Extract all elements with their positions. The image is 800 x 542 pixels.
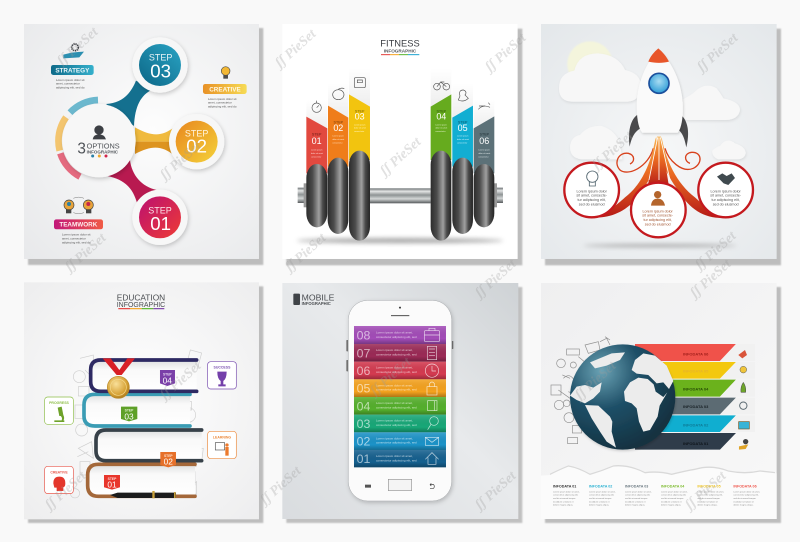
band text: Lorem ipsum dolor sit amet,: [376, 436, 413, 440]
info columns: INFODATA 01: [553, 485, 576, 489]
ribbon step 01: Lorem ipsum: [311, 149, 323, 152]
ribbon step 06: STEP: [480, 133, 490, 137]
watermarks: ʃʃ PieSet: [271, 26, 320, 72]
bookmark step 01: STEP: [108, 477, 117, 481]
teamwork label: Lorem ipsum dolor sit: [62, 233, 91, 237]
continents: [570, 352, 673, 448]
teamwork label: adipiscing elit, sed do: [62, 240, 91, 244]
step 01 circle: 01: [150, 213, 171, 234]
watermarks: ʃʃ PieSet: [156, 138, 205, 184]
circle centre: sit amet, consecte-: [642, 214, 674, 218]
center circle: [62, 104, 136, 177]
panel: three options infographic: [24, 24, 263, 265]
ribbon step 01: consectetur: [311, 155, 322, 158]
icon: businessman: [93, 125, 106, 139]
watermarks: ʃʃ PieSet: [481, 30, 530, 76]
info body text: consectetur adipiscing elit,: [553, 494, 579, 497]
info body text: sed do eiusmod tempor: [733, 497, 756, 500]
creative box: [45, 466, 73, 494]
watermarks: ʃʃ PieSet: [681, 468, 730, 514]
paper strips: [306, 68, 494, 130]
circle centre: tur adipiscing elit,: [644, 218, 672, 222]
bookmark step 04: STEP: [163, 373, 172, 377]
bar: [370, 188, 431, 203]
info body text: sed do eiusmod tempor: [697, 497, 720, 500]
ribbon step 02: dolor sit amet: [332, 138, 345, 141]
band 03: [635, 398, 755, 414]
circle right: tur adipiscing elit,: [712, 198, 740, 202]
band numbers: 06: [357, 364, 371, 378]
ribbon step 03: dolor sit amet: [354, 127, 366, 130]
step 03 circle: [132, 37, 188, 93]
info body text: sed do eiusmod tempor: [553, 497, 576, 500]
info body text: Lorem ipsum dolor sit amet,: [625, 490, 652, 493]
bookmark step 02: [160, 452, 176, 467]
ribbon step 02: STEP: [334, 120, 344, 124]
info body text: incididunt ut labore et: [553, 500, 574, 503]
band 04: [635, 380, 755, 397]
icon: teacher board: [215, 443, 229, 456]
watermarks: ʃʃ PieSet: [588, 128, 637, 174]
weights: [306, 164, 327, 227]
band 01: INFODATA 01: [683, 441, 709, 446]
band text: [376, 331, 417, 462]
circle centre: [631, 183, 686, 237]
step 02 circle: [169, 114, 224, 169]
bookmark step 02: 02: [164, 457, 173, 467]
band icons: [738, 350, 749, 450]
band text: Lorem ipsum dolor sit amet,: [376, 366, 413, 370]
info body text: dolore magna aliqua.: [661, 504, 682, 507]
title: EDUCATION: [117, 292, 165, 302]
watermarks: ʃʃ PieSet: [366, 354, 415, 400]
band text: Lorem ipsum dolor sit amet,: [376, 419, 413, 423]
band 02: INFODATA 02: [683, 422, 709, 427]
ribbon step 01: 01: [312, 136, 322, 146]
band 01: [635, 433, 736, 450]
info body text: dolore magna aliqua.: [733, 504, 754, 507]
cloud small: [712, 141, 746, 159]
ribbon step 06: [474, 116, 494, 173]
step 01 circle: [132, 190, 188, 245]
fitness icons: [312, 78, 490, 112]
circle right: sed do eiusmod: [713, 202, 739, 206]
ribbon step 01: [306, 117, 327, 173]
strategy label: Lorem ipsum dolor sit: [56, 78, 85, 82]
ribbon step 04: Lorem ipsum: [435, 123, 447, 126]
strategy label: amet, consectetur: [56, 82, 80, 86]
band text: Lorem ipsum dolor sit amet,: [376, 401, 413, 405]
book 2: [96, 430, 202, 461]
window: [649, 73, 669, 93]
ribbon step 03: consectetur: [354, 130, 365, 133]
ribbon step 05: consectetur: [457, 141, 468, 144]
bookmark step 01: [104, 475, 120, 490]
info body text: sed do eiusmod tempor: [589, 497, 612, 500]
band text: Lorem ipsum dolor sit amet,: [376, 454, 413, 458]
icon: handshake: [717, 173, 735, 185]
band 05: INFODATA 05: [683, 369, 709, 374]
bookmark step 04: [160, 370, 175, 386]
ribbon step 04: 04: [436, 112, 446, 122]
strategy label: [51, 44, 94, 90]
info body text: consectetur adipiscing elit,: [661, 494, 687, 497]
info body text: incididunt ut labore et: [589, 500, 610, 503]
ribbon step 06: dolor sit amet: [478, 152, 491, 155]
strategy label: STRATEGY: [55, 67, 90, 74]
ribbon step 02: Lorem ipsum: [332, 135, 344, 138]
sun halo: [567, 41, 613, 87]
band text: Lorem ipsum dolor sit amet,: [376, 383, 413, 387]
creative label: adipiscing elit, sed do: [208, 105, 237, 109]
title: INFOGRAPHIC: [384, 48, 417, 53]
swirls: [617, 148, 700, 172]
info body text: Lorem ipsum dolor sit amet,: [697, 490, 724, 493]
panel: mobile infographic: [282, 283, 522, 523]
icon: two heads: [64, 197, 93, 214]
circle left: sed do eiusmod: [579, 202, 605, 206]
info body text: [553, 490, 760, 507]
band text: consectetur adipiscing elit, sed: [376, 388, 417, 392]
watermarks: ʃʃ PieSet: [376, 134, 425, 180]
info columns: INFODATA 04: [661, 485, 685, 489]
watermarks: ʃʃ PieSet: [471, 468, 520, 514]
ribbon step 05: Lorem ipsum: [457, 135, 469, 138]
icon: trophy: [217, 372, 227, 386]
creative label: [203, 67, 247, 109]
book 1: [88, 464, 195, 496]
info body text: Lorem ipsum dolor sit amet,: [733, 490, 760, 493]
ribbon step 05: dolor sit amet: [457, 138, 469, 141]
band 04: INFODATA 04: [683, 387, 709, 392]
band text: Lorem ipsum dolor sit amet,: [376, 331, 413, 335]
center circle: 3: [77, 140, 86, 157]
info body text: incididunt ut labore et: [661, 500, 682, 503]
title: [293, 293, 335, 306]
doodles: [70, 350, 203, 498]
ribbon step 04: dolor sit amet: [435, 127, 448, 130]
success box: [208, 362, 236, 389]
book 4: [91, 360, 197, 391]
watermarks: ʃʃ PieSet: [256, 463, 305, 509]
watermarks: ʃʃ PieSet: [53, 24, 102, 70]
watermarks: ʃʃ PieSet: [471, 256, 520, 302]
ribbon step 04: [431, 94, 451, 160]
circle right: [698, 163, 753, 217]
ribbon step 03: STEP: [355, 109, 365, 113]
watermarks: ʃʃ PieSet: [61, 230, 110, 276]
progress box: PROGRESS: [49, 401, 70, 405]
ribbon step 03: 03: [355, 112, 365, 122]
info columns: INFODATA 03: [625, 485, 648, 489]
band 02: [635, 415, 755, 432]
circle right: Lorem ipsum dolor: [711, 189, 742, 193]
ribbon step 01: dolor sit amet: [311, 152, 323, 155]
info body text: consectetur adipiscing elit,: [625, 494, 651, 497]
circle centre: Lorem ipsum dolor: [643, 209, 674, 213]
floor shadow: [583, 244, 737, 247]
book 3: [84, 394, 190, 426]
bookmark step 03: STEP: [125, 409, 134, 413]
circle left: sit amet, consecte-: [576, 194, 608, 198]
info body text: incididunt ut labore et: [697, 500, 718, 503]
info body text: consectetur adipiscing elit,: [589, 494, 615, 497]
circle left: Lorem ipsum dolor: [577, 189, 608, 193]
step 03 circle: 03: [150, 61, 171, 82]
info body text: dolore magna aliqua.: [553, 504, 574, 507]
creative box: CREATIVE: [50, 471, 68, 475]
ribbon step 05: 05: [458, 123, 468, 133]
info columns: INFODATA 06: [733, 485, 757, 489]
icon: light bulb: [587, 171, 598, 186]
info body text: consectetur adipiscing elit,: [697, 494, 723, 497]
icon: businessman: [651, 191, 665, 206]
band numbers: 01: [357, 452, 371, 466]
icon: gear on hand: [63, 44, 84, 58]
band 06: INFODATA 06: [683, 351, 709, 356]
icon: head with gears: [53, 477, 65, 491]
icon: microscope: [54, 407, 64, 422]
teamwork label: TEAMWORK: [59, 222, 98, 229]
ribbon step 03: Lorem ipsum: [354, 123, 366, 126]
step 02 circle: STEP: [185, 129, 208, 139]
band 03: INFODATA 03: [683, 404, 709, 409]
title: INFOGRAPHIC: [302, 301, 331, 306]
band numbers: 08: [357, 329, 371, 343]
band numbers: 04: [357, 399, 371, 413]
step 01 circle: STEP: [148, 205, 172, 215]
panel: fitness infographic: [282, 24, 522, 265]
arc segments around center: [58, 100, 98, 177]
body: [637, 51, 683, 133]
camera and speaker: [399, 307, 401, 309]
floor shadow: [297, 238, 503, 243]
center circle: INFOGRAPHIC: [87, 149, 119, 154]
nose cone: [648, 48, 669, 63]
bookmark step 01: 01: [107, 480, 117, 490]
band text: consectetur adipiscing elit, sed: [376, 335, 417, 339]
info columns: INFODATA 02: [589, 485, 612, 489]
ribbon step 02: consectetur: [332, 141, 343, 144]
torn paper: [541, 465, 777, 519]
progress box: [45, 397, 73, 424]
creative label: Lorem ipsum dolor sit: [208, 97, 237, 101]
watermarks: ʃʃ PieSet: [691, 228, 740, 274]
band 05: [635, 362, 755, 379]
ribbon step 02: 02: [333, 123, 343, 133]
panel: education infographic: [24, 282, 263, 523]
info body text: sed do eiusmod tempor: [661, 497, 684, 500]
info body text: dolore magna aliqua.: [589, 504, 610, 507]
circle left: [564, 163, 619, 217]
pen: [110, 491, 176, 498]
band text: consectetur adipiscing elit, sed: [376, 352, 417, 356]
band icons: [424, 328, 440, 464]
title: [380, 39, 420, 55]
icon: light bulb: [221, 67, 230, 79]
info body text: dolore magna aliqua.: [697, 504, 718, 507]
band numbers: 03: [357, 417, 371, 431]
bookmark step 04: 04: [163, 375, 172, 385]
fins: [629, 114, 640, 147]
learning box: [208, 431, 236, 459]
info columns: [553, 485, 757, 489]
ribbon step 06: consectetur: [478, 155, 489, 158]
info columns: INFODATA 05: [697, 485, 721, 489]
rocket exhaust: [592, 137, 726, 218]
doodles: [551, 337, 610, 444]
cloud large: [559, 53, 641, 102]
success box: SUCCESS: [214, 366, 231, 370]
center circle: OPTIONS: [87, 142, 120, 151]
title: FITNESS: [380, 39, 420, 49]
watermarks: ʃʃ PieSet: [41, 468, 90, 514]
creative label: CREATIVE: [209, 86, 241, 93]
watermarks: [41, 24, 742, 514]
rocket: [629, 48, 688, 147]
title: MOBILE: [302, 293, 335, 303]
bookmark step 02: STEP: [164, 454, 173, 458]
panel: rocket infographic: [541, 24, 781, 265]
teamwork label: amet, consectetur: [62, 236, 86, 240]
home buttons: [388, 479, 412, 491]
learning box: LEARNING: [213, 435, 231, 439]
info body text: Lorem ipsum dolor sit amet,: [661, 490, 688, 493]
info body text: dolore magna aliqua.: [625, 504, 646, 507]
teamwork label: [54, 197, 103, 244]
bookmark step 03: 03: [124, 411, 134, 421]
band 06: [635, 344, 755, 361]
ribbon step 06: 06: [479, 136, 489, 146]
band numbers: 02: [357, 435, 371, 449]
band numbers: [357, 329, 371, 466]
title: INFOGRAPHIC: [117, 302, 165, 309]
globe: [570, 344, 675, 450]
ribbon step 04: consectetur: [435, 130, 446, 133]
connector: step 01: [107, 160, 157, 204]
info body text: consectetur adipiscing elit,: [733, 494, 759, 497]
band numbers: 05: [357, 382, 371, 396]
connector: step 03: [106, 81, 153, 126]
title: [117, 292, 165, 309]
ribbon step 04: STEP: [437, 109, 447, 113]
step 03 circle: STEP: [149, 53, 172, 63]
info body text: incididunt ut labore et: [625, 500, 646, 503]
ribbon step 05: [452, 106, 473, 167]
cloud lower left: [570, 126, 622, 159]
connector: step 02: [135, 127, 174, 155]
dumbbell: [298, 151, 503, 241]
info body text: Lorem ipsum dolor sit amet,: [589, 490, 616, 493]
panel: globe infographic: [541, 283, 781, 523]
bookmark step 03: [121, 407, 137, 421]
watermarks: ʃʃ PieSet: [571, 358, 620, 404]
info body text: sed do eiusmod tempor: [625, 497, 648, 500]
band text: consectetur adipiscing elit, sed: [376, 370, 417, 374]
watermarks: ʃʃ PieSet: [686, 256, 735, 302]
ribbon step 03: [349, 94, 370, 160]
band text: consectetur adipiscing elit, sed: [376, 441, 417, 445]
band text: Lorem ipsum dolor sit amet,: [376, 348, 413, 352]
watermarks: ʃʃ PieSet: [281, 230, 330, 276]
ribbon step 02: [328, 106, 348, 167]
band numbers: 07: [357, 346, 371, 360]
band text: consectetur adipiscing elit, sed: [376, 423, 417, 427]
info body text: incididunt ut labore et: [733, 500, 754, 503]
cloud right: [681, 86, 740, 120]
watermarks: ʃʃ PieSet: [693, 30, 742, 76]
strategy label: adipiscing elit, sed do: [56, 86, 85, 90]
band text: consectetur adipiscing elit, sed: [376, 458, 417, 462]
phone: [346, 300, 453, 501]
ribbon step 05: STEP: [458, 120, 468, 124]
circle centre: sed do eiusmod: [645, 222, 671, 226]
circle right: sit amet, consecte-: [710, 194, 742, 198]
ribbon step 06: Lorem ipsum: [478, 149, 490, 152]
screen bands: [354, 326, 446, 467]
info body text: Lorem ipsum dolor sit amet,: [553, 490, 580, 493]
creative label: amet, consectetur: [208, 101, 232, 105]
step 02 circle: 02: [186, 136, 207, 157]
band text: consectetur adipiscing elit, sed: [376, 405, 417, 409]
ribbon step 01: STEP: [312, 133, 322, 137]
circle left: tur adipiscing elit,: [578, 198, 606, 202]
medal: [103, 358, 135, 398]
watermarks: ʃʃ PieSet: [156, 358, 205, 404]
